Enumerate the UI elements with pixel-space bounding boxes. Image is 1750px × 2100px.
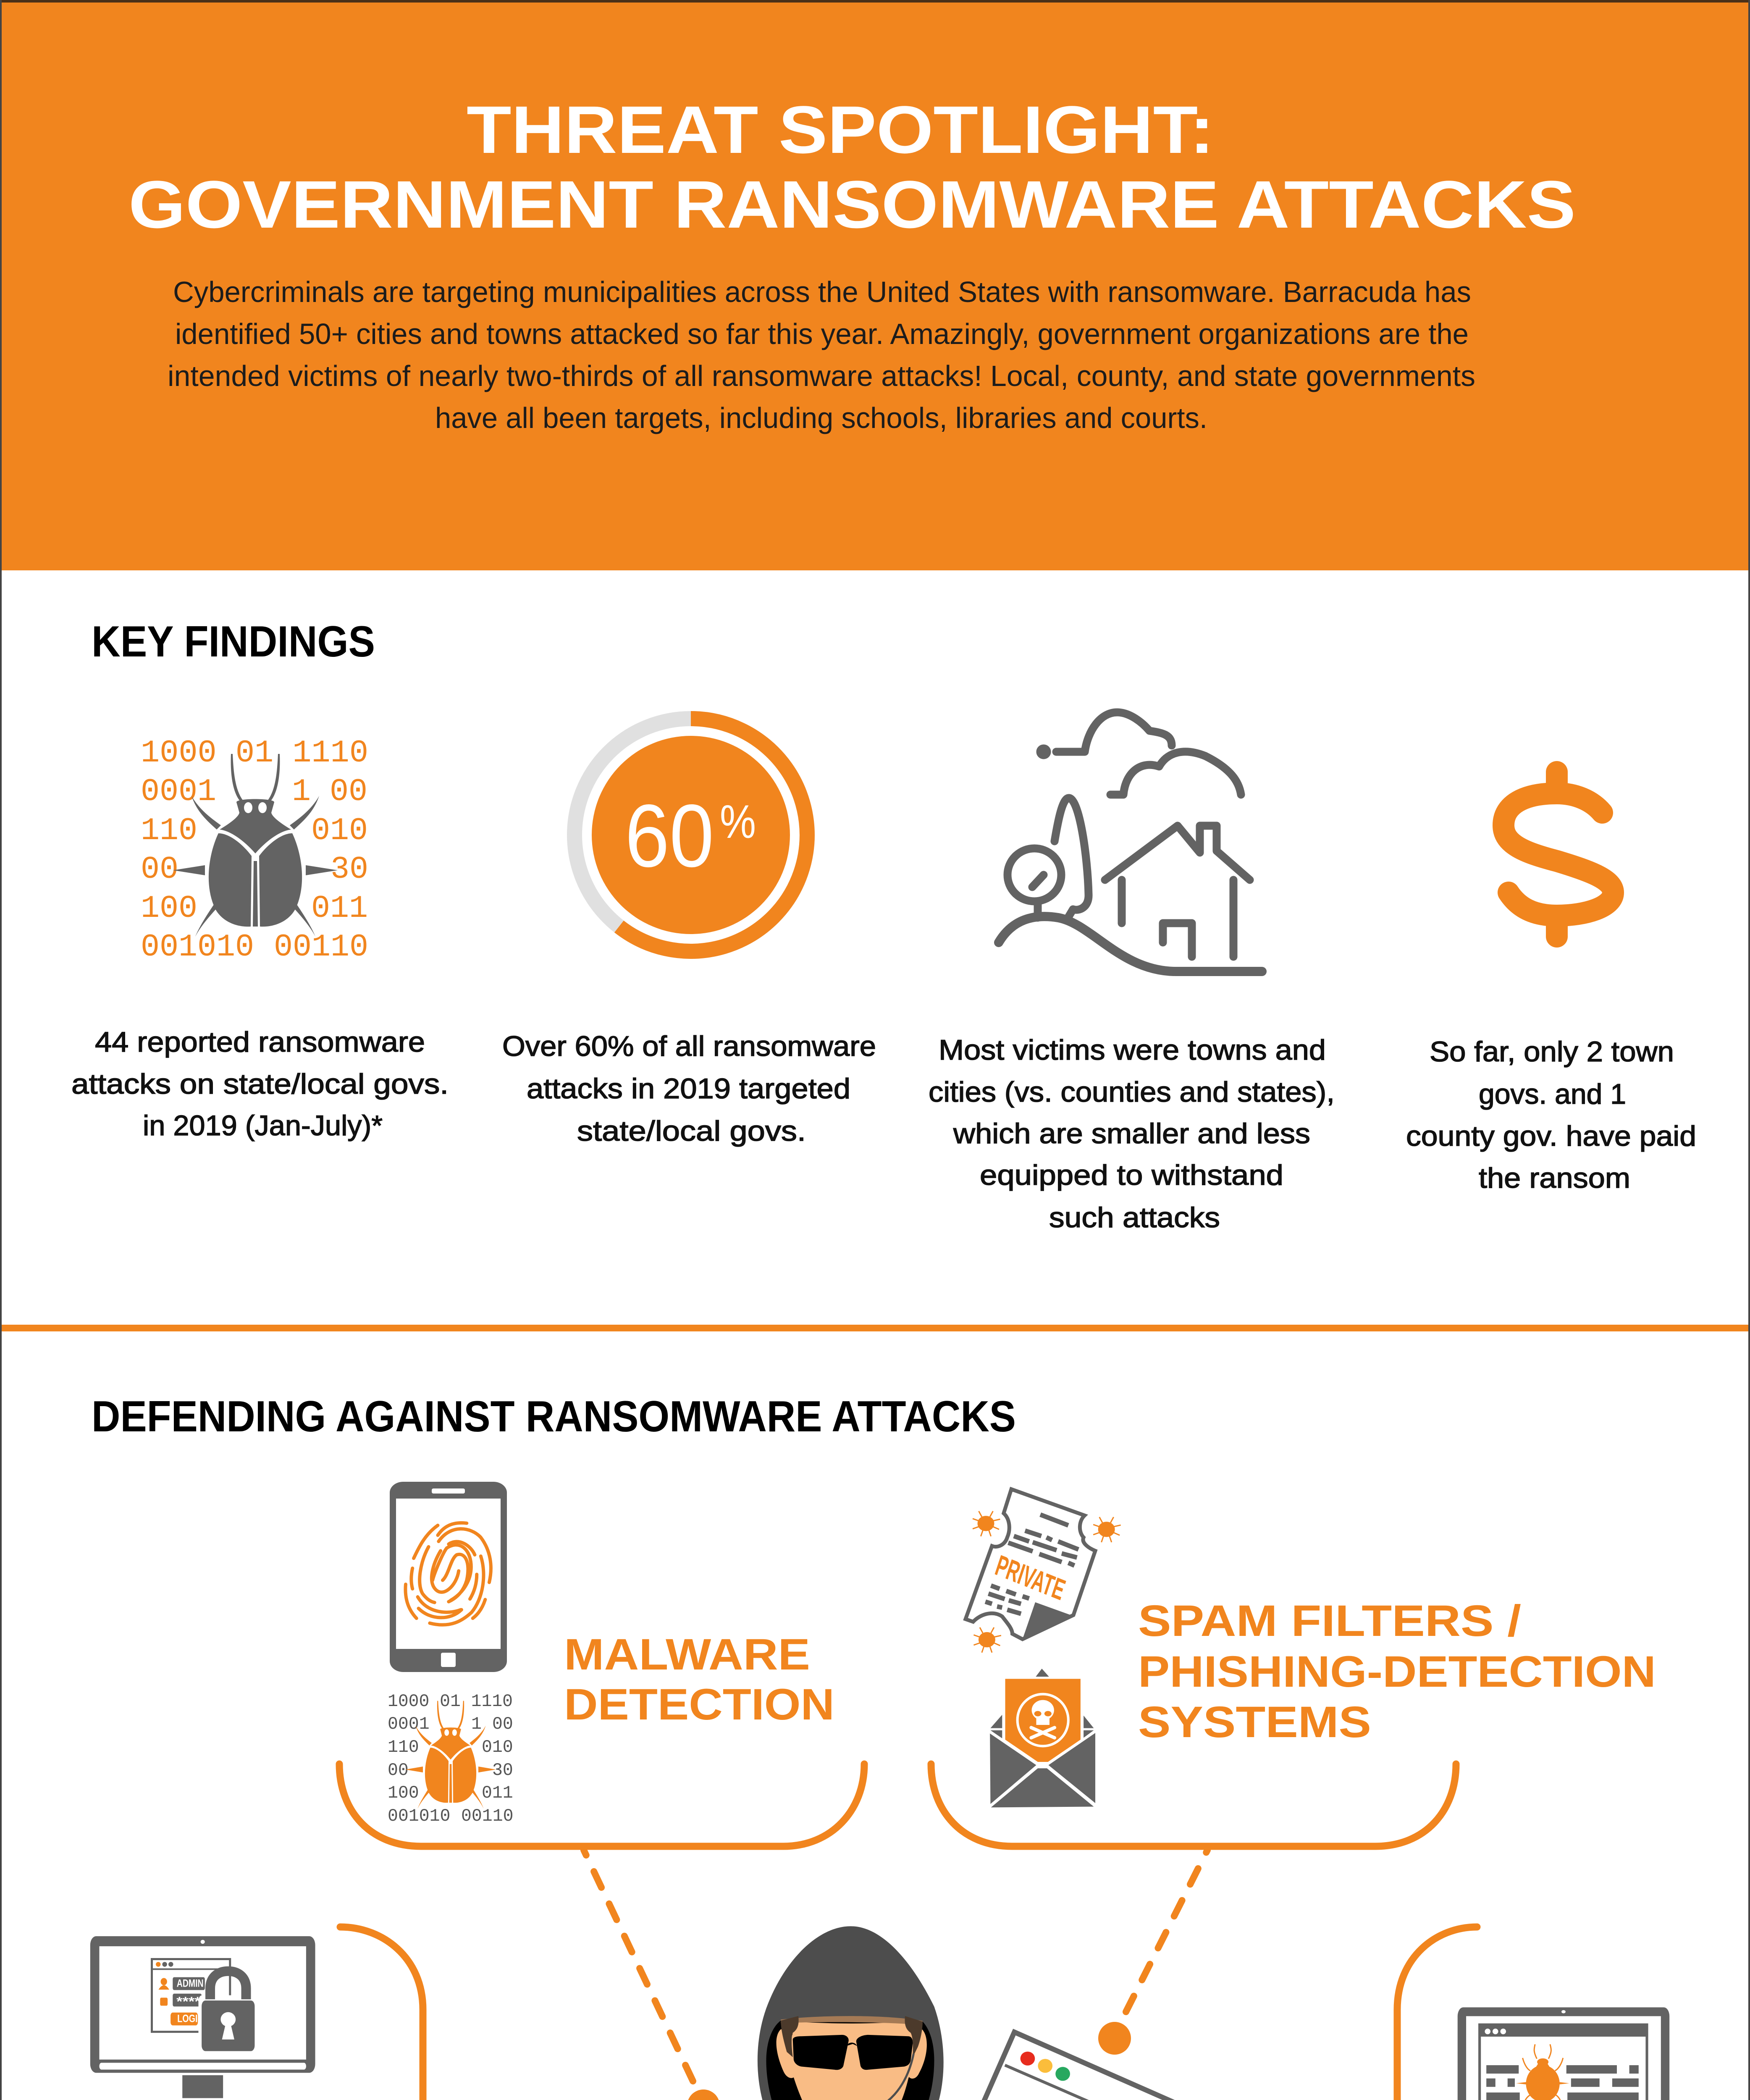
label: spam filters: [1138, 1596, 1656, 1747]
intro text: identified 50+ cities and towns attacked so far this year. Amazingly, government organizations are the: [175, 318, 1469, 350]
icon: malware bug in code: 010: [482, 1738, 513, 1757]
icon: bug in binary code: 110: [141, 813, 197, 849]
icon: bug in binary code: 010: [311, 813, 368, 849]
panel: key findings: [71, 617, 1696, 1234]
text: finding 2: Over 60% of all ransomware: [502, 1030, 876, 1062]
text: finding 4: So far, only 2 town: [1430, 1036, 1674, 1068]
icon: envelope with skull: [990, 1669, 1095, 1807]
icon: private document with bugs: PRIVATE: [992, 1549, 1069, 1606]
icon: malware bug in code: 1000 01 1110: [388, 1692, 513, 1712]
text: finding 4: county gov. have paid: [1406, 1120, 1696, 1152]
title: GOVERNMENT RANSOMWARE ATTACKS: [129, 167, 1576, 242]
text: finding 3: which are smaller and less: [953, 1118, 1310, 1150]
icon: bug in binary code: 00: [141, 852, 178, 887]
icon: monitor with padlock: ADMIN: [177, 1978, 204, 1989]
icon: malware bug in code: [388, 1692, 514, 1826]
intro text: have all been targets, including schools, libraries and courts.: [435, 402, 1207, 434]
title: THREAT SPOTLIGHT:: [467, 92, 1214, 167]
icon: malware bug in code: 011: [482, 1783, 513, 1803]
icon: bug in binary code: 1: [292, 774, 311, 810]
icon: malware bug in code: 30: [492, 1761, 513, 1780]
icon: bug in binary code: 100: [141, 891, 197, 927]
icon: monitor with padlock: ****: [176, 1994, 201, 2009]
panel: defending against ransomware attacks: [71, 1392, 1725, 2100]
chart: 60 percent ring: 60: [625, 786, 714, 885]
icon: malware bug in code: 110: [388, 1738, 419, 1757]
illustration: login window with magnifier behind hacker: [921, 2032, 1240, 2100]
panel: header: [0, 0, 1750, 570]
icon: bug in binary code: 001010: [141, 929, 254, 965]
text: finding 3: such attacks: [1049, 1202, 1220, 1234]
icon: private document with bugs: [966, 1489, 1121, 1653]
icon: dollar sign: [1503, 772, 1613, 937]
title: [129, 92, 1576, 242]
text: finding 3: Most victims were towns and: [939, 1034, 1326, 1066]
icon: bug in binary code: 011: [311, 891, 368, 927]
icon: monitor with padlock: [90, 1936, 315, 2100]
icon: malware bug in code: 100: [388, 1783, 419, 1803]
text: finding 2: state/local govs.: [577, 1115, 806, 1147]
text: finding 3: cities (vs. counties and states),: [929, 1076, 1335, 1108]
text: finding 1: attacks on state/local govs.: [71, 1068, 449, 1100]
icon: bug in binary code: 30: [331, 852, 368, 887]
intro text: [168, 276, 1475, 434]
icon: malware bug in code: 00: [388, 1761, 409, 1780]
label: malware detection: [564, 1630, 834, 1729]
icon: monitor with bug: [1458, 2007, 1669, 2100]
text: finding 4: govs. and 1: [1479, 1078, 1626, 1110]
chart: 60 percent ring: [575, 719, 807, 951]
text: finding 3: equipped to withstand: [980, 1159, 1283, 1191]
icon: house on hill: [999, 712, 1262, 971]
icon: malware bug in code: 0001: [388, 1714, 430, 1734]
icon: phone with fingerprint: [390, 1482, 507, 1672]
intro text: intended victims of nearly two-thirds of all ransomware attacks! Local, county, and state governments: [168, 360, 1475, 392]
label: spam filters: SYSTEMS: [1138, 1698, 1371, 1747]
heading: key findings: KEY FINDINGS: [92, 617, 375, 666]
icon: malware bug in code: 00110: [461, 1806, 514, 1826]
label: malware detection: MALWARE: [564, 1630, 810, 1679]
connectors: brackets and dashes: [339, 1764, 1482, 2100]
label: spam filters: PHISHING-DETECTION: [1138, 1647, 1656, 1696]
icon: monitor with padlock: LOGI: [177, 2013, 198, 2025]
intro text: Cybercriminals are targeting municipalities across the United States with ransomware. Barracuda has: [173, 276, 1471, 308]
icon: bug in binary code: 0001: [141, 774, 216, 810]
icon: bug in binary code: 1000 01 1110: [141, 735, 368, 771]
label: malware detection: DETECTION: [564, 1680, 834, 1729]
icon: malware bug in code: 001010: [388, 1806, 450, 1826]
heading: defending: DEFENDING AGAINST RANSOMWARE ATTACKS: [92, 1392, 1016, 1441]
text: finding 2: [502, 1030, 876, 1147]
text: finding 1: [71, 1026, 449, 1142]
icon: bug in binary code: 00: [330, 774, 367, 810]
icon: bug in binary code: 00110: [274, 929, 368, 965]
illustration: hacker with laptop: [758, 1926, 944, 2100]
text: finding 4: [1406, 1036, 1696, 1194]
text: finding 3: [929, 1034, 1335, 1234]
text: finding 2: attacks in 2019 targeted: [527, 1073, 850, 1105]
icon: malware bug in code: 1: [471, 1714, 482, 1734]
chart: 60 percent ring: %: [720, 795, 756, 848]
label: spam filters: SPAM FILTERS /: [1138, 1596, 1521, 1646]
icon: malware bug in code: 00: [492, 1714, 513, 1734]
text: finding 1: in 2019 (Jan-July)*: [143, 1110, 383, 1142]
icon: bug in binary code: [141, 735, 368, 965]
text: finding 4: the ransom: [1479, 1162, 1630, 1194]
text: finding 1: 44 reported ransomware: [95, 1026, 425, 1058]
